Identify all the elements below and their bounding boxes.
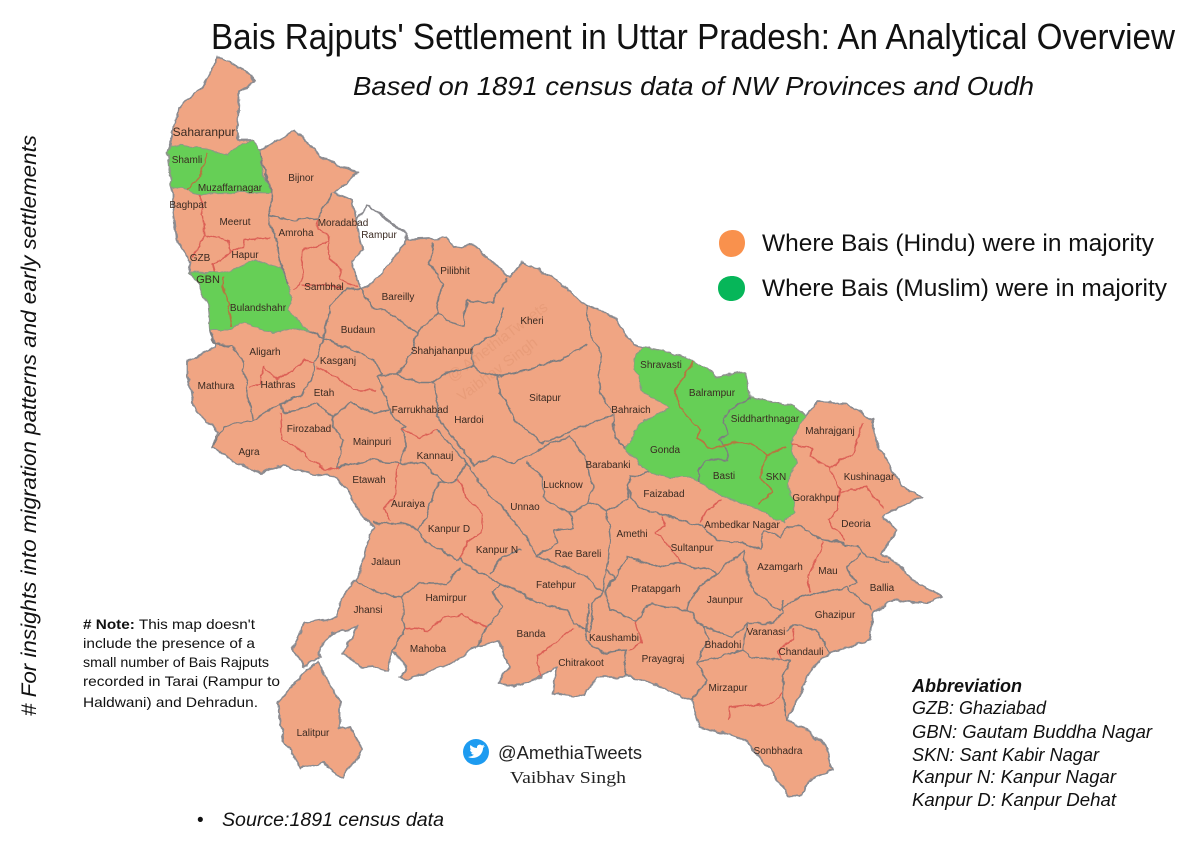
abbreviation list: GBN: Gautam Buddha Nagar xyxy=(912,722,1153,742)
district labels: Jhansi xyxy=(354,605,382,616)
district labels: Jalaun xyxy=(371,557,401,568)
district labels: Kanpur D xyxy=(428,524,470,535)
district labels: Kannauj xyxy=(417,451,453,462)
district labels: Basti xyxy=(713,471,735,482)
district labels: Agra xyxy=(238,447,260,458)
district labels: Banda xyxy=(517,629,546,640)
district labels: Pilibhit xyxy=(440,266,470,277)
district labels: Farrukhabad xyxy=(392,405,448,416)
district labels: Gorakhpur xyxy=(792,493,840,504)
district labels: Mahoba xyxy=(410,644,447,655)
credit xyxy=(463,739,642,787)
district labels: Ambedkar Nagar xyxy=(704,520,780,531)
district labels: Siddharthnagar xyxy=(731,414,800,425)
district labels: Amroha xyxy=(278,228,314,239)
district labels: Mahrajganj xyxy=(805,426,855,437)
note: Haldwani) and Dehradun. xyxy=(83,694,258,710)
note xyxy=(83,616,280,710)
district labels: Bijnor xyxy=(288,173,314,184)
map region: Hindu majority districts xyxy=(167,57,943,796)
district labels: Hardoi xyxy=(454,415,484,426)
abbreviation list: Kanpur D: Kanpur Dehat xyxy=(912,790,1117,810)
abbreviation list xyxy=(911,676,1153,810)
abbreviation list: Kanpur N: Kanpur Nagar xyxy=(912,767,1117,787)
abbreviation list: SKN: Sant Kabir Nagar xyxy=(912,745,1100,765)
district labels: GBN xyxy=(196,274,220,286)
abbreviation list: GZB: Ghaziabad xyxy=(912,698,1047,718)
district labels: Ghazipur xyxy=(815,610,856,621)
district labels: Lucknow xyxy=(543,480,584,491)
subtitle: Based on 1891 census data of NW Provinces and Oudh xyxy=(353,71,1034,101)
watermark: @ AmethiaTweets xyxy=(444,299,551,385)
district labels: Fatehpur xyxy=(536,580,577,591)
map region: Muslim majority, eastern districts xyxy=(625,348,805,523)
legend label: Muslim majority: Where Bais (Muslim) were in majority xyxy=(762,275,1167,302)
district labels: Balrampur xyxy=(689,388,736,399)
legend label: Hindu majority: Where Bais (Hindu) were in majority xyxy=(762,230,1154,257)
district labels: Deoria xyxy=(841,519,871,530)
district labels: Chandauli xyxy=(778,647,824,658)
map region: Muslim majority, GBN and Bulandshahr xyxy=(188,259,310,333)
district labels: Auraiya xyxy=(391,499,425,510)
district labels: Hamirpur xyxy=(425,593,467,604)
abbreviation list: Abbreviation xyxy=(911,676,1022,696)
district labels: Meerut xyxy=(219,217,251,228)
district labels: Chitrakoot xyxy=(558,658,604,669)
source: • xyxy=(197,810,204,831)
district labels: Kheri xyxy=(520,316,544,327)
district labels: Varanasi xyxy=(747,627,785,638)
district labels: Jaunpur xyxy=(707,595,744,606)
source: Source:1891 census data xyxy=(222,810,444,831)
legend icon: orange blob xyxy=(719,230,745,257)
district labels: Bahraich xyxy=(611,405,651,416)
district labels: Kaushambi xyxy=(589,633,639,644)
note: include the presence of a xyxy=(83,635,255,651)
district boundaries xyxy=(187,152,890,720)
district labels: Shamli xyxy=(172,155,202,166)
district labels: Kushinagar xyxy=(844,472,895,483)
district labels: Barabanki xyxy=(585,460,631,471)
district labels: Budaun xyxy=(341,325,375,336)
district labels: Etawah xyxy=(352,475,386,486)
district labels: Shravasti xyxy=(640,360,682,371)
note: recorded in Tarai (Rampur to xyxy=(83,673,280,689)
district labels: Mathura xyxy=(198,381,235,392)
district labels: Azamgarh xyxy=(757,562,803,573)
map region: Rampur (no data) xyxy=(352,205,407,290)
district labels: Lalitpur xyxy=(297,728,330,739)
district labels: Kasganj xyxy=(320,356,356,367)
district labels: Rampur xyxy=(361,230,397,241)
district labels: Hathras xyxy=(260,380,296,391)
district labels: Sultanpur xyxy=(671,543,714,554)
side note: vertical caption: # For insights into migration patterns and early settlements xyxy=(18,134,41,716)
legend icon: green blob xyxy=(718,276,745,301)
district labels: Baghpat xyxy=(169,200,207,211)
district labels: Pratapgarh xyxy=(631,584,681,595)
map: Uttar Pradesh districts xyxy=(167,57,943,796)
district labels: Rae Bareli xyxy=(555,549,601,560)
district labels: Etah xyxy=(314,388,334,399)
district labels: Shahjahanpur xyxy=(411,346,474,357)
legend xyxy=(718,230,1167,302)
district labels: Moradabad xyxy=(318,218,368,229)
map region: Muslim majority, Shamli and Muzaffarnagar xyxy=(167,140,272,195)
watermark: Vaibhav Singh xyxy=(454,334,541,405)
district labels: Prayagraj xyxy=(642,654,684,665)
district labels: Sambhal xyxy=(304,282,344,293)
district labels: Sonbhadra xyxy=(754,746,803,757)
district labels: Ballia xyxy=(870,583,895,594)
district labels: Unnao xyxy=(510,502,540,513)
district labels: Amethi xyxy=(616,529,648,540)
icon: twitter bird xyxy=(463,739,489,765)
district labels: Mau xyxy=(818,566,838,577)
district labels: Sitapur xyxy=(529,393,562,404)
district labels: Mirzapur xyxy=(709,683,748,694)
district labels: Mainpuri xyxy=(353,437,391,448)
district labels: Bulandshahr xyxy=(230,303,287,314)
district labels: Hapur xyxy=(231,250,259,261)
district labels: GZB xyxy=(190,253,211,264)
district labels xyxy=(169,125,895,757)
district labels: SKN xyxy=(766,472,786,483)
district labels: Saharanpur xyxy=(173,125,235,139)
note: # Note: This map doesn't xyxy=(83,616,255,632)
author name: Vaibhav Singh xyxy=(510,768,627,787)
district labels: Aligarh xyxy=(249,347,281,358)
district labels: Muzaffarnagar xyxy=(198,183,263,194)
district labels: Bareilly xyxy=(382,292,414,303)
district labels: Kanpur N xyxy=(476,545,518,556)
handle: @AmethiaTweets xyxy=(498,743,642,763)
note: small number of Bais Rajputs xyxy=(83,654,269,670)
district labels: Gonda xyxy=(650,445,680,456)
district labels: Bhadohi xyxy=(705,640,741,651)
district labels: Firozabad xyxy=(287,424,331,435)
district labels: Faizabad xyxy=(643,489,685,500)
